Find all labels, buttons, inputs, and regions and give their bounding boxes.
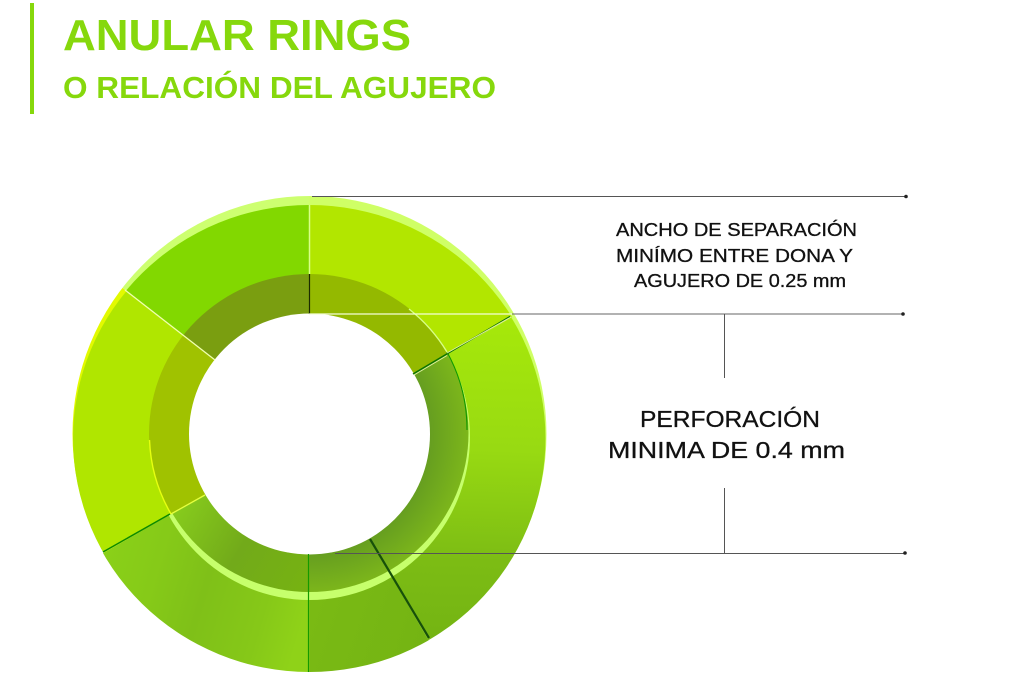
segment: lower left bbox=[103, 494, 310, 672]
segment: lower right bbox=[310, 538, 429, 672]
segment: right bbox=[370, 316, 546, 640]
divider lines bbox=[103, 205, 511, 672]
text block: separation width: AGUJERO DE 0.25 mm bbox=[634, 271, 846, 291]
leader line: hole top bbox=[309, 312, 905, 316]
inner ring edge bbox=[150, 309, 467, 514]
segment: left bbox=[72, 288, 214, 553]
accent bar bbox=[30, 3, 34, 114]
text block: minimum drill: MINIMA DE 0.4 mm bbox=[608, 437, 845, 463]
leader line: hole bottom bbox=[335, 551, 907, 555]
centre hole bbox=[189, 314, 430, 554]
text block: separation width bbox=[616, 219, 857, 291]
leader line: top bbox=[312, 195, 908, 198]
segment: upper right bbox=[310, 196, 515, 373]
dimension line: upper bbox=[724, 314, 726, 378]
segment: upper left bbox=[122, 196, 310, 360]
subtitle: O RELACIÓN DEL AGUJERO bbox=[63, 69, 496, 105]
text block: minimum drill bbox=[608, 406, 845, 463]
dimension line: lower bbox=[724, 488, 726, 553]
title: ANULAR RINGS bbox=[63, 11, 411, 60]
donut chart bbox=[72, 196, 549, 672]
text block: separation width: ANCHO DE SEPARACIÓN bbox=[616, 219, 857, 240]
text block: separation width: MINÍMO ENTRE DONA Y bbox=[616, 246, 853, 266]
text block: minimum drill: PERFORACIÓN bbox=[640, 406, 820, 432]
